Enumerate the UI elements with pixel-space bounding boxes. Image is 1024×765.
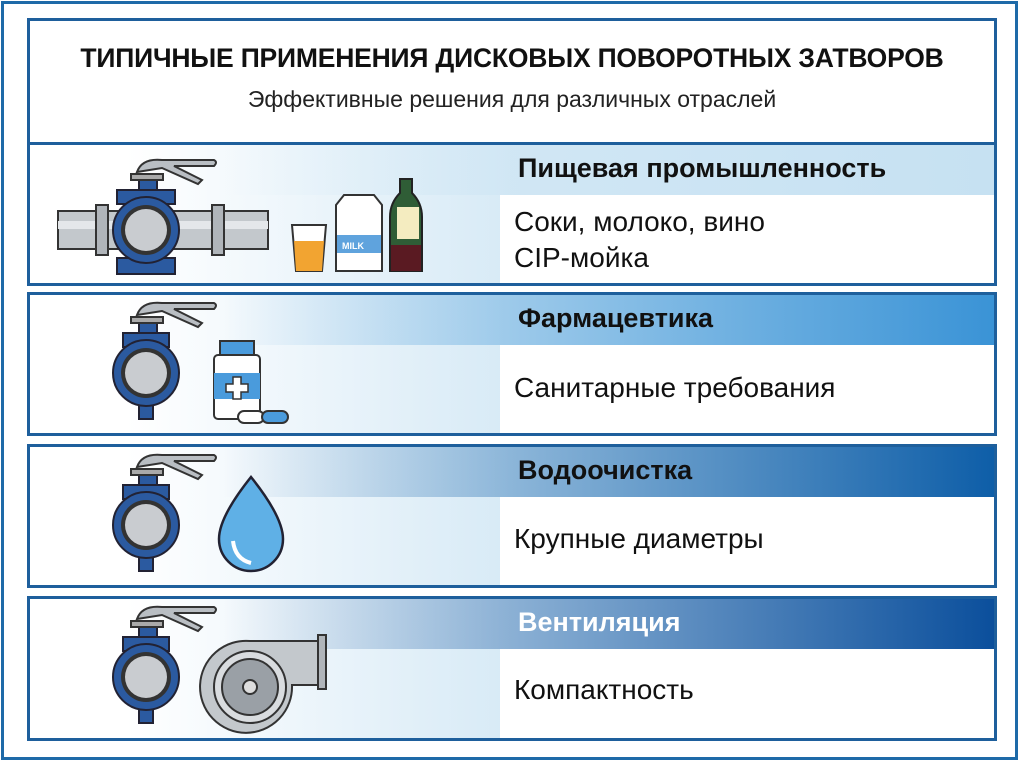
panel: water treatment	[27, 444, 997, 588]
heading: ventilation: Вентиляция	[518, 607, 681, 637]
icons: valve and medicine	[112, 302, 289, 424]
heading: food: Пищевая промышленность	[518, 153, 886, 183]
text: water: Крупные диаметры	[514, 523, 764, 554]
icons: valve and fan	[112, 606, 327, 734]
icons: valve on pipe and drinks	[57, 158, 423, 275]
text: food: Соки, молоко, вино	[514, 206, 765, 237]
panel: food industry	[27, 142, 997, 286]
icons: valve on pipe and drinks: MILK	[342, 241, 364, 251]
header frame	[27, 18, 997, 142]
text: food	[514, 206, 765, 273]
subtitle: Эффективные решения для различных отраслей	[248, 86, 776, 112]
panel: pharma	[27, 292, 997, 436]
heading: water: Водоочистка	[518, 455, 692, 485]
heading: pharma: Фармацевтика	[518, 303, 713, 333]
text: pharma: Санитарные требования	[514, 372, 835, 403]
icons: valve and water drop	[112, 454, 284, 572]
panel: ventilation	[27, 596, 997, 741]
title: ТИПИЧНЫЕ ПРИМЕНЕНИЯ ДИСКОВЫХ ПОВОРОТНЫХ ЗАТВОРОВ	[80, 43, 944, 73]
text: ventilation: Компактность	[514, 674, 694, 705]
text: food: CIP-мойка	[514, 242, 649, 273]
